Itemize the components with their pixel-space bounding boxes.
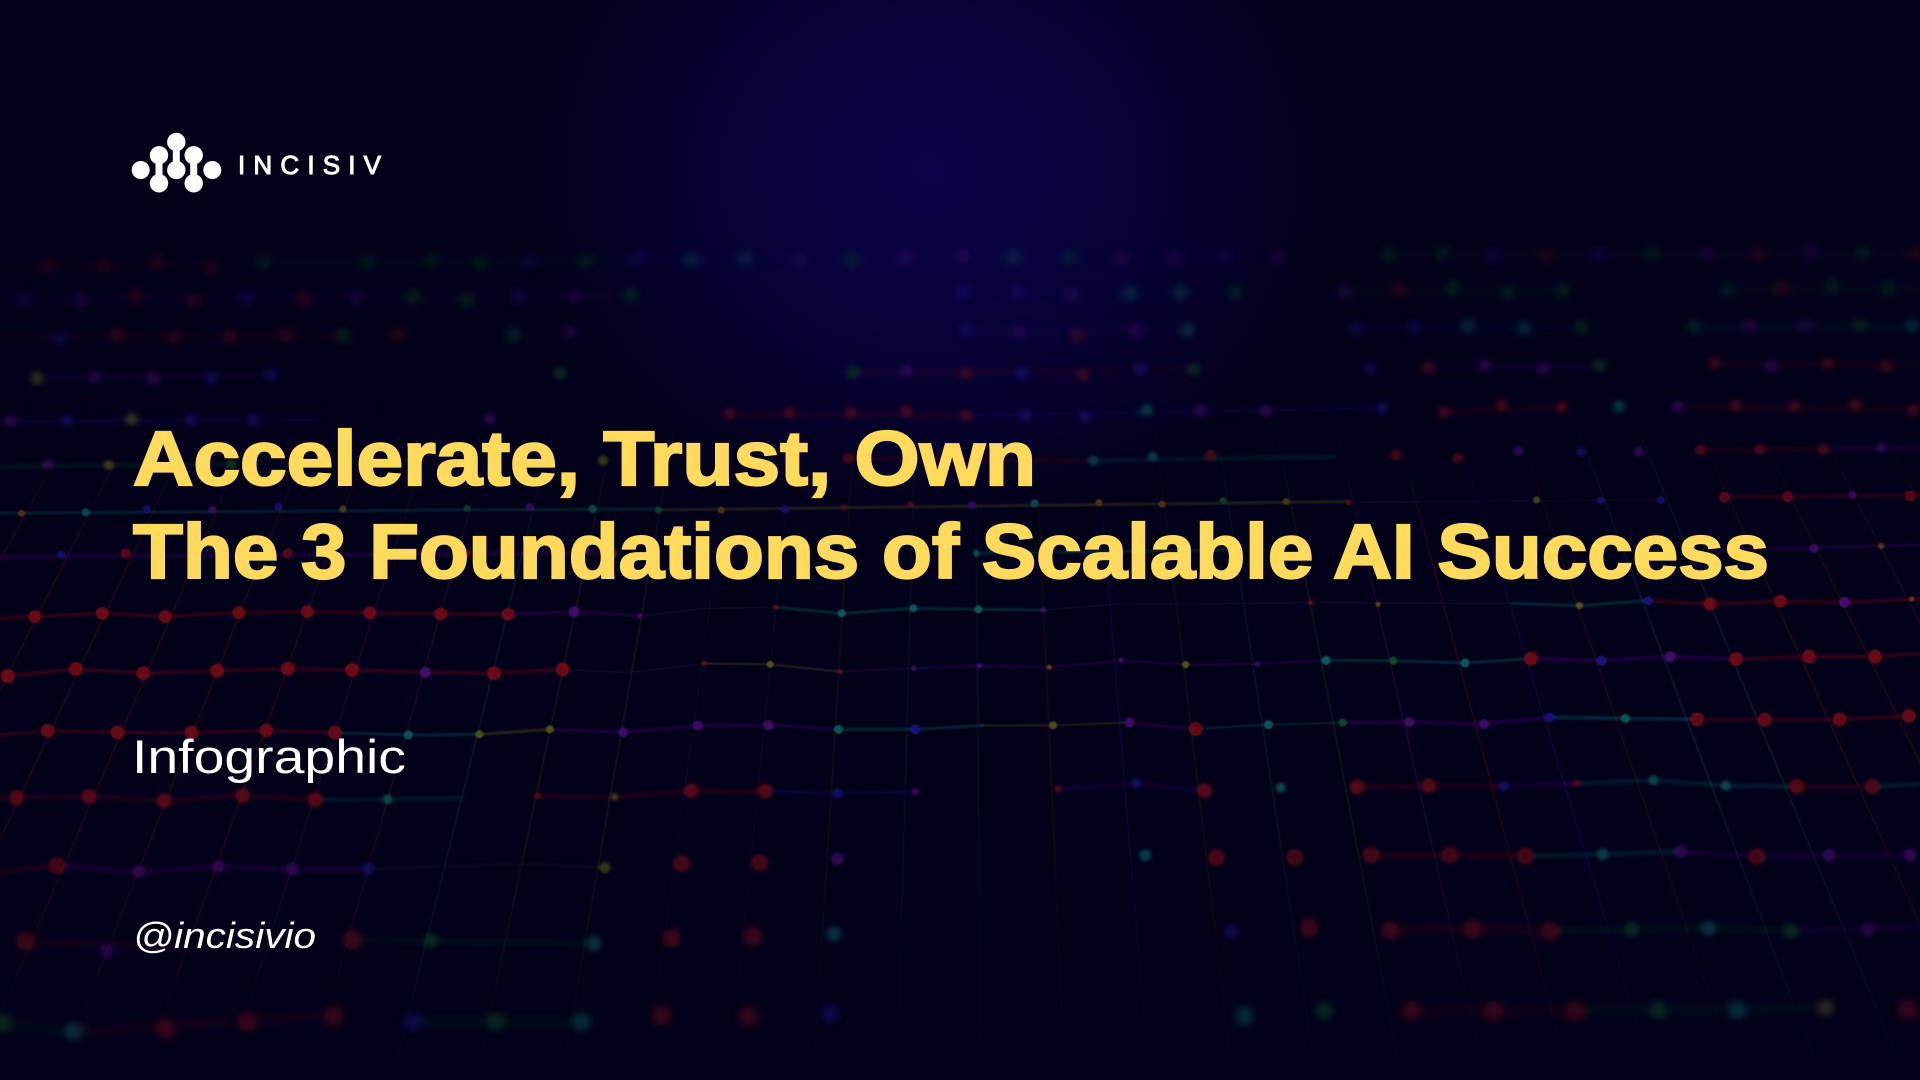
grid row: far blurred row 5 [0, 405, 1920, 422]
title [133, 416, 1769, 595]
grid row: far blurred row 4 [37, 363, 1920, 378]
grid row: near row A [0, 599, 1920, 618]
grid row: near row D [0, 780, 1920, 801]
grid row: near row C [0, 716, 1909, 735]
grid row: far blurred row 3 [0, 326, 1920, 338]
icon: connected dots mark [132, 133, 221, 192]
logo wordmark: INCISIV [238, 150, 382, 180]
grid row: near row G [0, 1008, 1908, 1032]
grid row: near row F [26, 927, 1920, 951]
social handle: @incisivio [133, 915, 316, 956]
subtitle: Infographic [132, 730, 406, 783]
grid row: near row E [0, 852, 1910, 872]
perspective grid: vertical lines [0, 452, 1920, 1016]
grid row: mid row 6 [0, 448, 1920, 467]
title: The 3 Foundations of Scalable AI Success [133, 509, 1769, 595]
grid row: row 8 behind title [0, 545, 1920, 557]
grid row: near row B [0, 653, 1920, 680]
grid row: mid row 7 [0, 495, 1920, 513]
grid row: far blurred row 2 [0, 287, 1920, 301]
title: Accelerate, Trust, Own [133, 416, 1036, 502]
logo: Incisiv [132, 133, 382, 192]
grid row: far blurred row 1 [0, 252, 1915, 267]
